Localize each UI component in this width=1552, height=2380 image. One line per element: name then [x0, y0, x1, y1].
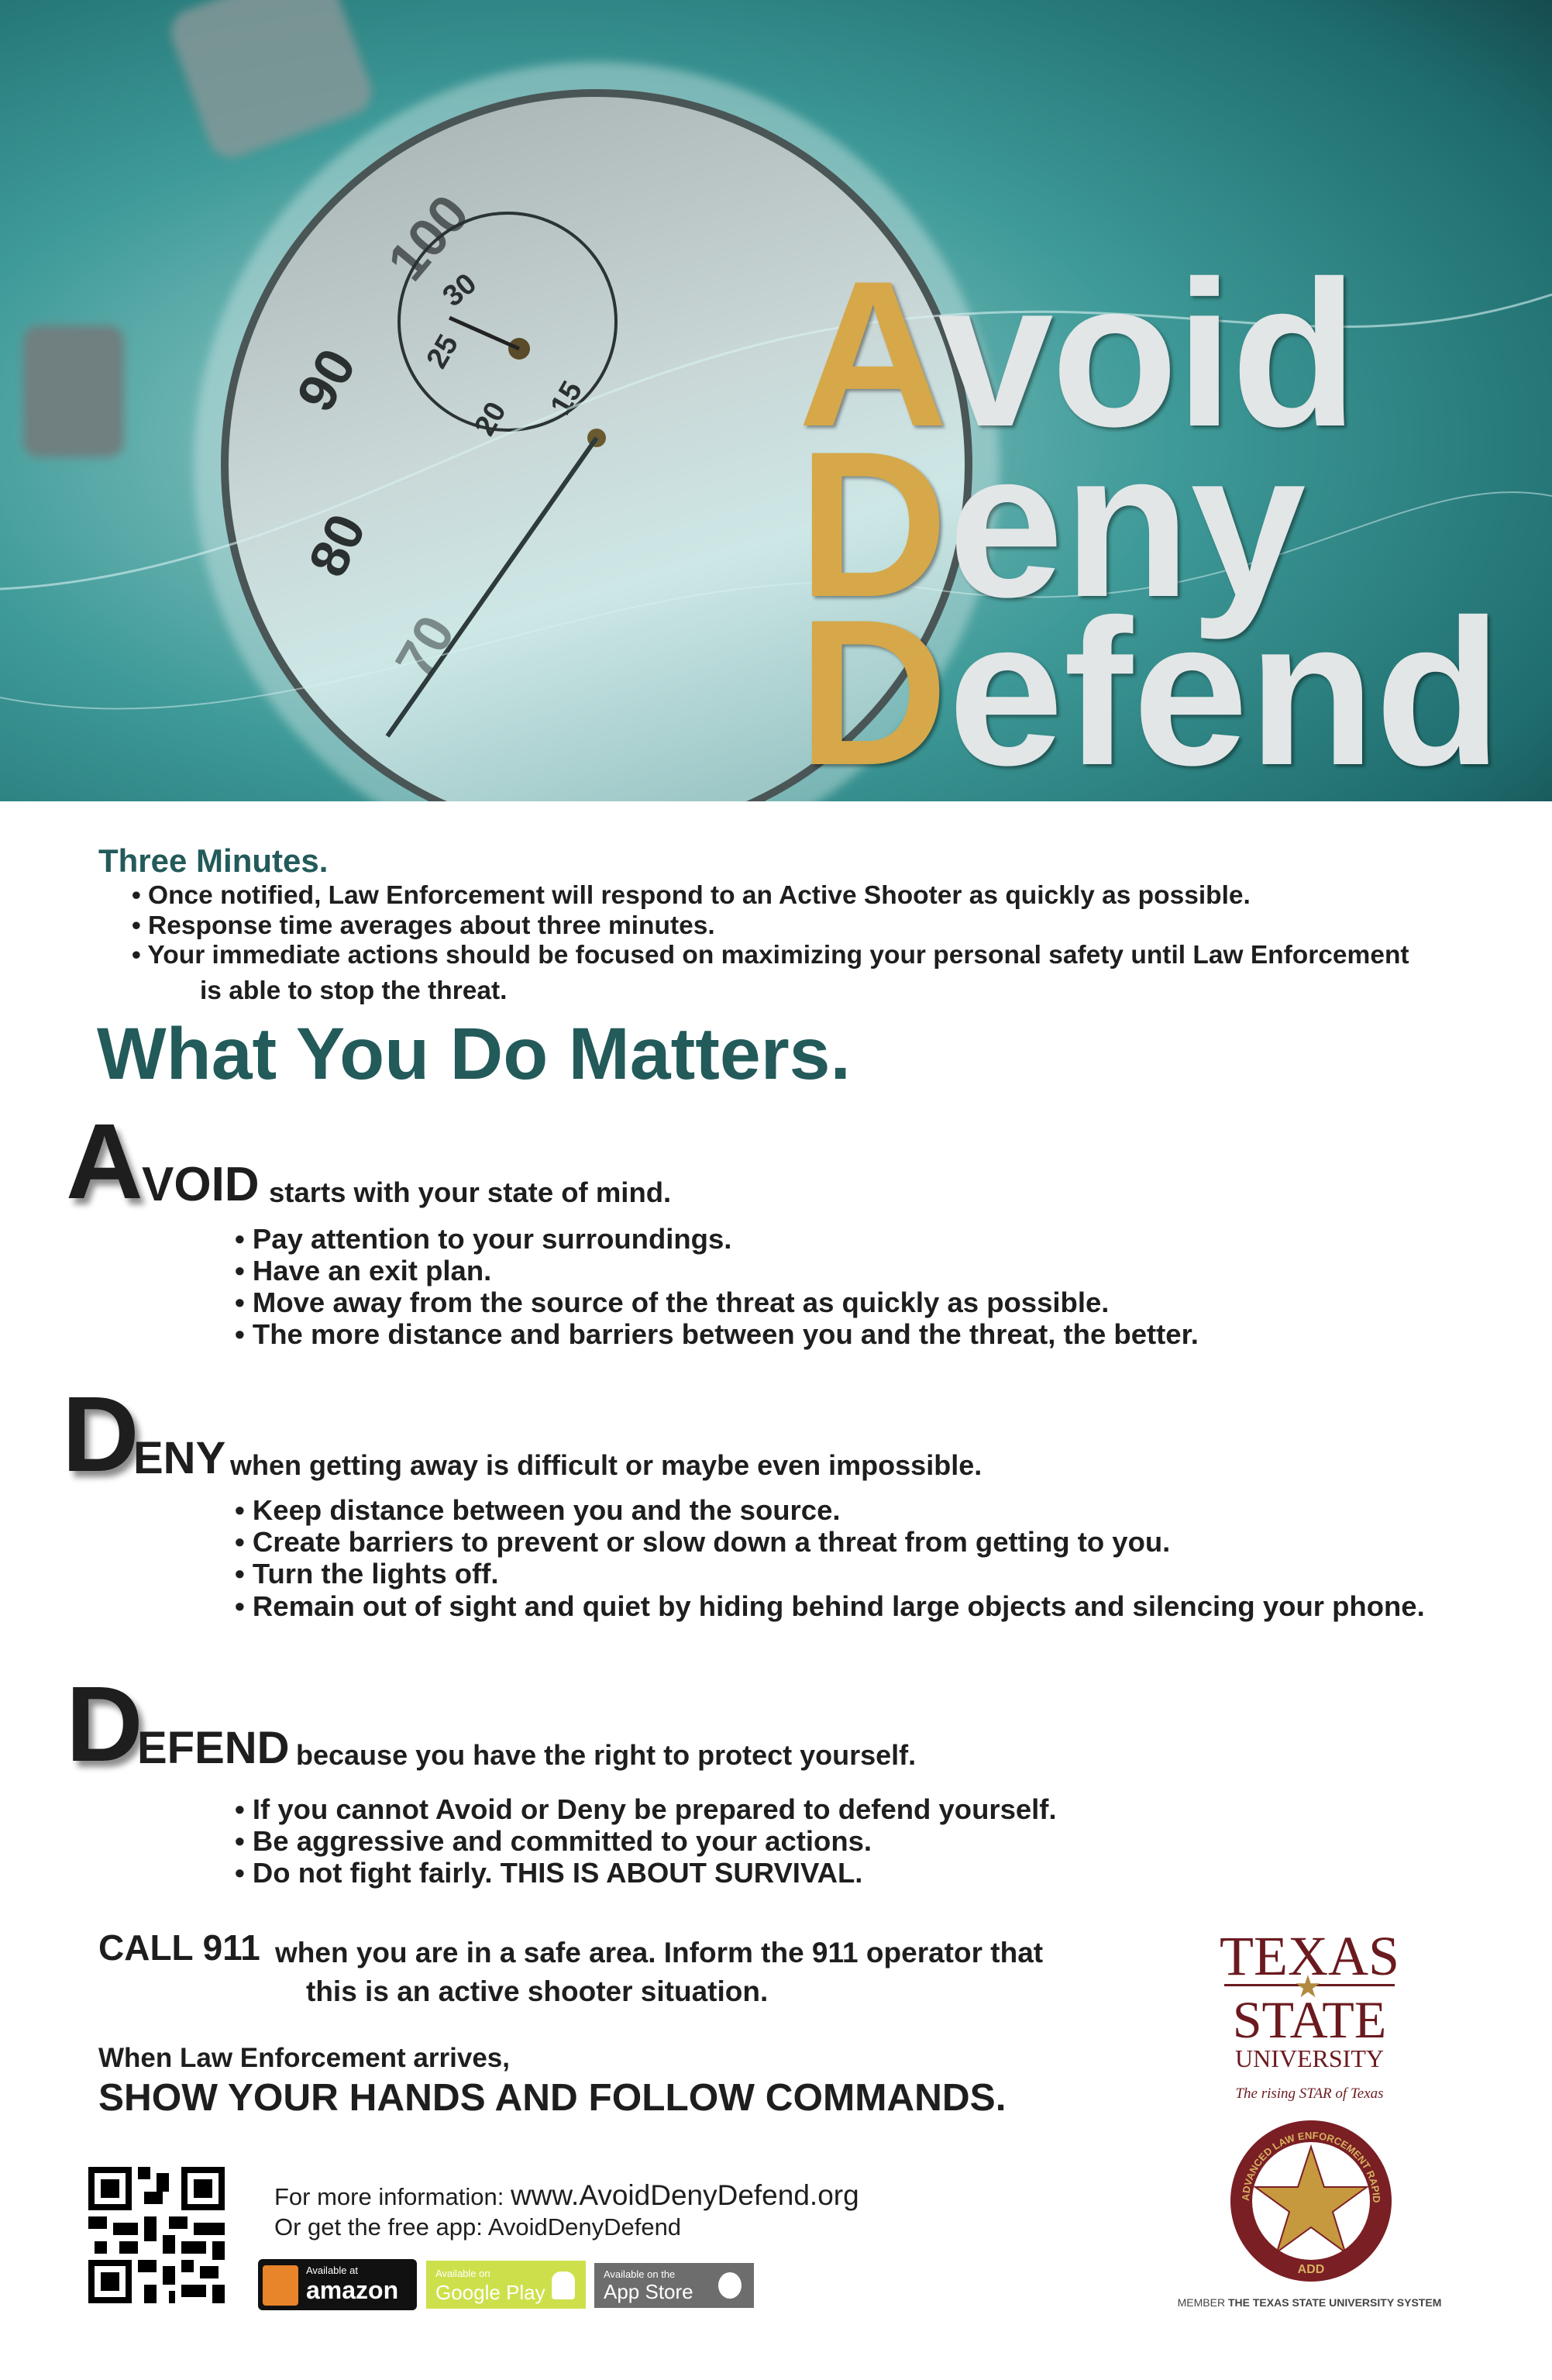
icon: stopwatch: 100	[376, 184, 480, 291]
icon: app store badge: App Store	[604, 2280, 693, 2303]
section: Defend: • Be aggressive and committed to your actions.	[235, 1825, 872, 1857]
section: Deny: when getting away is difficult or maybe even impossible.	[230, 1449, 982, 1481]
title: Avoid Deny Defend	[798, 237, 1502, 808]
icon: amazon badge	[258, 2259, 417, 2310]
text block: more information	[274, 2179, 859, 2241]
icon: ALERRT seal: ADD	[1298, 2263, 1324, 2276]
section: Deny: ENY	[133, 1433, 225, 1483]
icon: ALERRT seal	[1230, 2120, 1392, 2282]
section: Avoid: • Pay attention to your surroundings.	[235, 1223, 731, 1255]
callout: call 911: CALL 911	[98, 1927, 260, 1968]
callout: show your hands: When Law Enforcement arrives,	[98, 2043, 510, 2073]
section: Avoid: • The more distance and barriers between you and the threat, the better.	[235, 1318, 1199, 1350]
section: Avoid: A	[66, 1102, 143, 1221]
icon: stopwatch: 80	[297, 505, 377, 585]
callout: call 911	[98, 1927, 1043, 2007]
icon: stopwatch: 20	[468, 397, 513, 441]
section: Deny: • Create barriers to prevent or slow down a threat from getting to you.	[235, 1526, 1170, 1558]
heading: Three Minutes: Three Minutes.	[98, 842, 328, 879]
section: Avoid: VOID	[142, 1158, 260, 1211]
section: Defend: because you have the right to protect yourself.	[296, 1739, 916, 1771]
logo: Texas State University: STATE	[1233, 1990, 1386, 2049]
section: Deny: D	[62, 1375, 139, 1494]
text block: three minutes bullets	[132, 881, 1409, 1005]
section: Deny: • Turn the lights off.	[235, 1558, 499, 1590]
logo: Texas State University	[1178, 1925, 1441, 2309]
icon: amazon badge: amazon	[306, 2276, 398, 2304]
icon: google play badge: Available on	[435, 2268, 490, 2279]
text block: three minutes bullets: • Once notified, Law Enforcement will respond to an Active Shooter as quickly as possible.	[132, 881, 1251, 910]
logo: Texas State University: ★	[1294, 1969, 1322, 2004]
icon: google play badge: Google Play	[435, 2281, 545, 2304]
section: Avoid: starts with your state of mind.	[269, 1176, 671, 1208]
icon: google play badge	[426, 2261, 586, 2309]
icon: stopwatch: 15	[545, 376, 589, 420]
icon: amazon badge: Available at	[306, 2265, 358, 2276]
icon: stopwatch	[0, 0, 1552, 868]
callout: show your hands: SHOW YOUR HANDS AND FOLLOW COMMANDS.	[98, 2076, 1006, 2119]
section: Defend	[66, 1665, 1057, 1889]
section: Defend: D	[66, 1665, 143, 1784]
icon: QR code	[88, 2167, 225, 2303]
section: Defend: EFEND	[137, 1723, 290, 1773]
logo: Texas State University: UNIVERSITY	[1235, 2044, 1384, 2072]
icon: app store badge: Available on the	[604, 2268, 675, 2280]
section: Defend: • Do not fight fairly. THIS IS ABOUT SURVIVAL.	[235, 1857, 862, 1889]
heading: What You Do Matters: What You Do Matters.	[97, 1013, 851, 1095]
section: Deny: • Keep distance between you and the source.	[235, 1494, 841, 1526]
icon: stopwatch: 25	[421, 329, 465, 374]
callout: call 911: when you are in a safe area. Inform the 911 operator that	[275, 1937, 1043, 1968]
section: Avoid	[66, 1102, 1199, 1350]
icon: app store badge	[594, 2263, 754, 2308]
header banner	[0, 0, 1552, 808]
section: Defend: • If you cannot Avoid or Deny be prepared to defend yourself.	[235, 1793, 1057, 1825]
section: Deny	[62, 1375, 1425, 1622]
text block: three minutes bullets: • Your immediate actions should be focused on maximizing your personal safety until Law Enforcement	[132, 941, 1409, 970]
section: Avoid: • Move away from the source of the threat as quickly as possible.	[235, 1286, 1109, 1318]
text block: three minutes bullets: is able to stop the threat.	[200, 976, 507, 1005]
text block: more information: Or get the free app: AvoidDenyDefend	[274, 2213, 681, 2241]
title: Avoid Deny Defend: Deny	[798, 408, 1306, 640]
title: Avoid Deny Defend: Avoid	[798, 237, 1356, 470]
callout: call 911: this is an active shooter situation.	[306, 1975, 768, 2007]
logo: Texas State University: MEMBER THE TEXAS STATE UNIVERSITY SYSTEM	[1178, 2296, 1441, 2309]
icon: stopwatch: 90	[285, 339, 367, 421]
logo: Texas State University: The rising STAR of Texas	[1235, 2086, 1384, 2102]
section: Deny: • Remain out of sight and quiet by hiding behind large objects and silencing your phone.	[235, 1590, 1425, 1622]
callout: show your hands	[98, 2043, 1006, 2119]
section: Avoid: • Have an exit plan.	[235, 1255, 491, 1286]
logo: Texas State University: TEXAS	[1220, 1925, 1399, 1987]
text block: more information: For more information: www.AvoidDenyDefend.org	[274, 2179, 859, 2211]
title: Avoid Deny Defend: Defend	[798, 576, 1502, 808]
text block: three minutes bullets: • Response time averages about three minutes.	[132, 911, 715, 940]
icon: stopwatch: 70	[384, 605, 466, 688]
icon: stopwatch: 30	[437, 267, 483, 313]
